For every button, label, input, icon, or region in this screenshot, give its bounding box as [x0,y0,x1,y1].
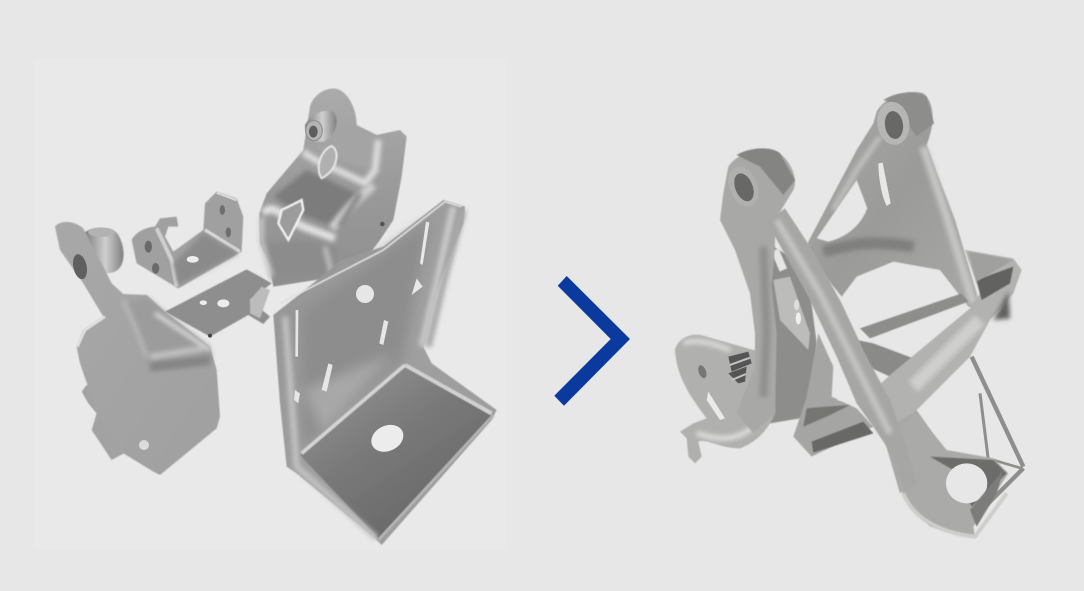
boss with hole [305,111,337,142]
floor hole [367,420,408,457]
top boss face [883,93,934,137]
rear web with top boss [807,92,980,310]
panel: left backdrop [35,58,507,550]
upper bracket part [259,89,407,287]
central cluster behind legs [760,247,817,423]
left cover bracket [55,222,220,475]
rear tab of left cover [82,385,147,460]
floor of bracket [300,365,493,538]
flat strip part [165,269,272,338]
large L bracket [273,200,497,545]
thin truss struts [972,357,1023,517]
illustration: multi-part assembled bracket [55,89,497,545]
plate holes [294,222,429,403]
vertical plate [273,200,497,545]
left boss cylinder [83,227,124,273]
bend highlights [302,365,405,453]
upper slot, triangular [278,200,303,240]
rear cup arm [877,380,947,493]
twisted band [863,250,1022,425]
left leg with boss [720,148,795,433]
left hooked plate [675,335,775,463]
small U bracket [132,192,243,288]
arrow: blue chevron [554,276,630,406]
upper slot, oval [319,146,337,178]
lower left loop of band [793,333,873,457]
main diagonal strut [767,208,917,492]
cross rib [860,293,968,338]
illustration: generatively designed single-piece bracket [675,92,1023,537]
bottom cup with round opening [890,413,1008,537]
web slot [878,163,891,206]
web cut-out [817,180,867,242]
